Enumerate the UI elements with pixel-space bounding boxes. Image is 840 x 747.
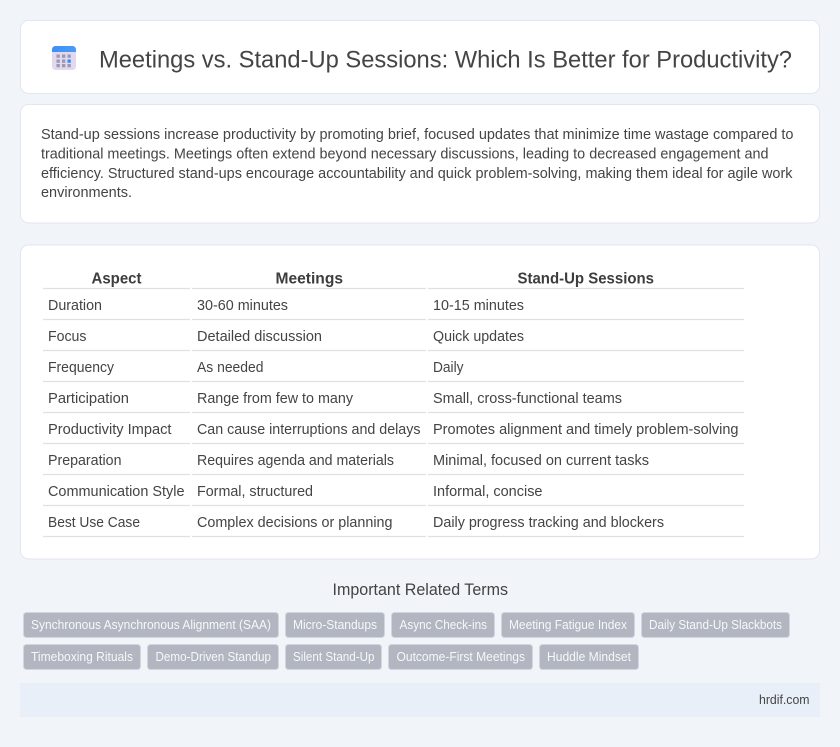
chip: SAA: Synchronous Asynchronous Alignment (SAA) bbox=[31, 618, 271, 632]
chip: outcome-first meetings bbox=[388, 644, 532, 670]
row: participation: Range from few to many bbox=[197, 391, 354, 407]
chip: async check-ins bbox=[392, 612, 494, 638]
row: productivity impact bbox=[48, 422, 738, 438]
title: Meetings vs. Stand-Up Sessions: Which Is Better for Productivity? bbox=[99, 46, 792, 74]
summary paragraph: traditional meetings. Meetings often extend beyond necessary discussions, leading to decreased engagement and bbox=[41, 146, 768, 162]
summary paragraph bbox=[41, 127, 794, 201]
row: productivity impact: Promotes alignment and timely problem-solving bbox=[433, 422, 738, 438]
related term chips bbox=[24, 612, 790, 670]
row: duration: 30-60 minutes bbox=[197, 298, 288, 314]
chip: async check-ins: Async Check-ins bbox=[400, 618, 487, 632]
row: focus: Focus bbox=[48, 329, 86, 345]
row: best use case: Best Use Case bbox=[48, 515, 140, 531]
row: productivity impact: Productivity Impact bbox=[48, 422, 172, 438]
chip: demo-driven standup: Demo-Driven Standup bbox=[156, 650, 271, 664]
row: focus: Quick updates bbox=[433, 329, 524, 345]
table header row: Aspect bbox=[92, 270, 142, 288]
chip: slackbots bbox=[642, 612, 790, 638]
footer bbox=[20, 683, 820, 717]
footer source: hrdif.com bbox=[759, 692, 810, 707]
chip: meeting fatigue index bbox=[502, 612, 634, 638]
chip: meeting fatigue index: Meeting Fatigue Index bbox=[509, 618, 628, 632]
row: duration: 10-15 minutes bbox=[433, 298, 524, 314]
row: best use case bbox=[48, 515, 664, 531]
chip: slackbots: Daily Stand-Up Slackbots bbox=[649, 618, 782, 632]
row: frequency bbox=[48, 360, 464, 376]
table header row: Stand-Up Sessions bbox=[518, 270, 654, 288]
row: productivity impact: Can cause interruptions and delays bbox=[197, 422, 420, 438]
row: frequency: As needed bbox=[197, 360, 264, 376]
chip: huddle mindset: Huddle Mindset bbox=[547, 650, 632, 664]
row: communication style bbox=[48, 484, 542, 500]
summary paragraph: efficiency. Structured stand-ups encourage accountability and quick problem-solving, making them ideal for agile work bbox=[41, 166, 793, 182]
summary paragraph: Stand-up sessions increase productivity by promoting brief, focused updates that minimize time wastage compared to bbox=[41, 127, 794, 143]
icon: calendar bbox=[52, 46, 76, 70]
row: participation: Small, cross-functional teams bbox=[433, 391, 622, 407]
summary paragraph: environments. bbox=[41, 185, 132, 201]
table header row: Meetings bbox=[276, 270, 343, 288]
chip: timeboxing rituals bbox=[24, 644, 140, 670]
row: focus bbox=[48, 329, 524, 345]
chip: timeboxing rituals: Timeboxing Rituals bbox=[31, 650, 133, 664]
chip: silent stand-up bbox=[286, 644, 382, 670]
row: preparation bbox=[48, 453, 649, 469]
panel: comparison table bbox=[20, 245, 820, 559]
row: preparation: Preparation bbox=[48, 453, 122, 469]
row: duration bbox=[48, 298, 524, 314]
row: duration: Duration bbox=[48, 298, 102, 314]
chip: silent stand-up: Silent Stand-Up bbox=[293, 650, 375, 664]
chip: demo-driven standup bbox=[148, 644, 278, 670]
row: best use case: Complex decisions or planning bbox=[197, 515, 392, 531]
row: communication style: Communication Style bbox=[48, 484, 184, 500]
panel: summary bbox=[20, 104, 820, 223]
chip: micro-standups bbox=[286, 612, 384, 638]
chip: SAA bbox=[24, 612, 278, 638]
row: preparation: Requires agenda and materials bbox=[197, 453, 394, 469]
heading: important related terms: Important Related Terms bbox=[332, 581, 508, 599]
row: participation bbox=[48, 391, 622, 407]
row: participation: Participation bbox=[48, 391, 129, 407]
chip: micro-standups: Micro-Standups bbox=[293, 618, 377, 632]
row: frequency: Daily bbox=[433, 360, 464, 376]
table header row bbox=[92, 270, 654, 288]
row: communication style: Informal, concise bbox=[433, 484, 542, 500]
row: focus: Detailed discussion bbox=[197, 329, 322, 345]
row: best use case: Daily progress tracking and blockers bbox=[433, 515, 664, 531]
row: preparation: Minimal, focused on current tasks bbox=[433, 453, 649, 469]
chip: huddle mindset bbox=[540, 644, 638, 670]
row: communication style: Formal, structured bbox=[197, 484, 313, 500]
panel: header bbox=[20, 20, 820, 94]
chip: outcome-first meetings: Outcome-First Meetings bbox=[396, 650, 525, 664]
row: frequency: Frequency bbox=[48, 360, 115, 376]
